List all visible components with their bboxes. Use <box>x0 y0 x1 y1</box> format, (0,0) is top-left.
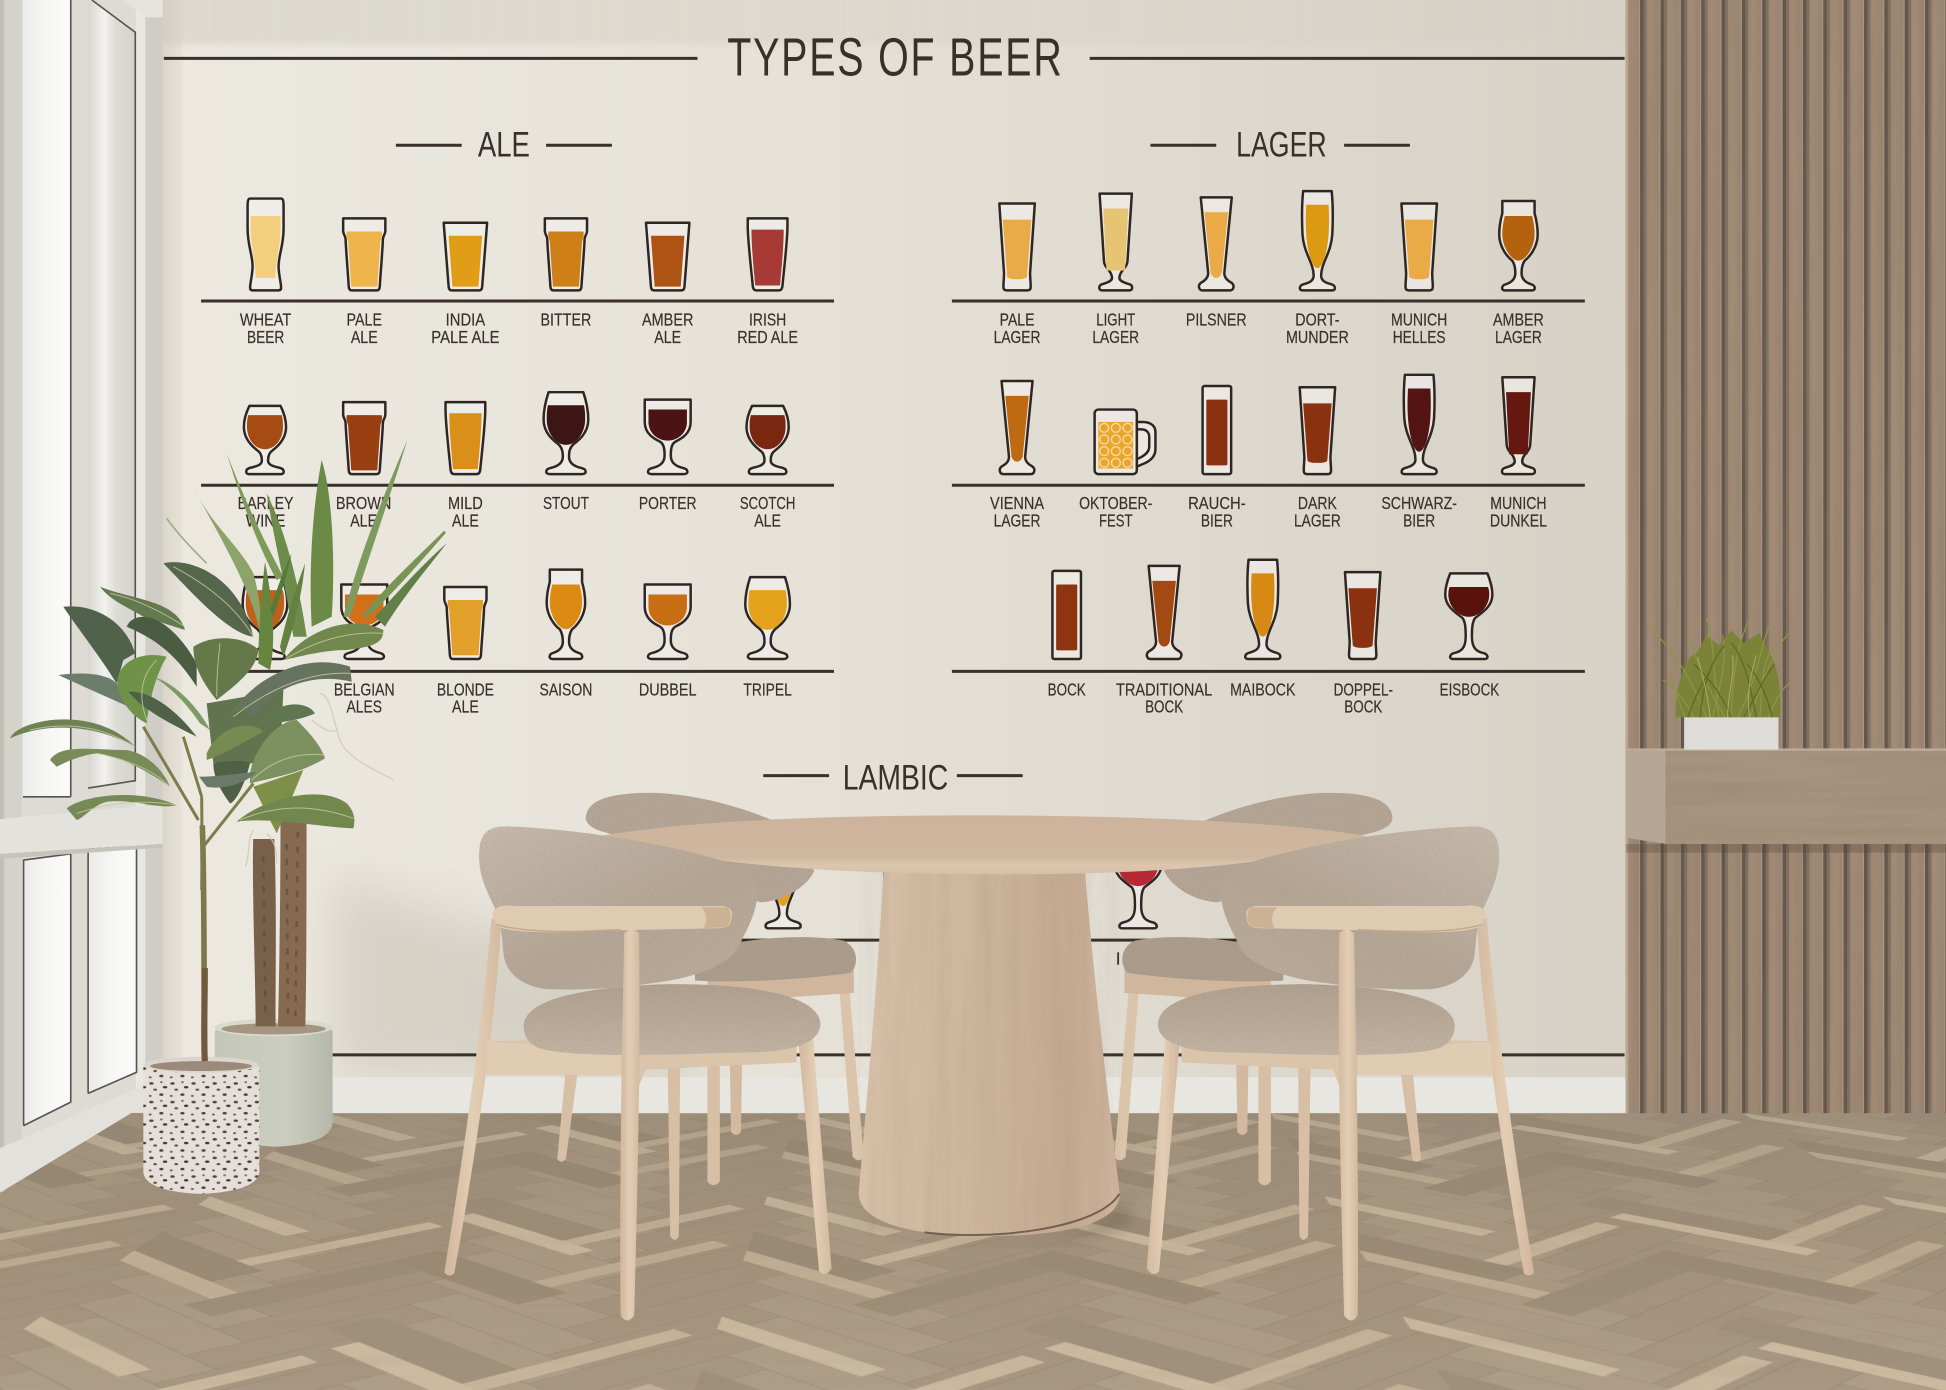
icon: oktoberfest mug <box>1095 410 1155 474</box>
label: dortmunder: DORT- <box>1295 310 1340 330</box>
icon: hidden lambic glass left <box>766 829 801 928</box>
label: traditional bock: TRADITIONAL <box>1116 679 1213 699</box>
label: bitter: BITTER <box>540 310 591 330</box>
label: pale ale: PALE <box>347 310 382 330</box>
label: wheat beer: WHEAT <box>240 310 292 330</box>
label: dortmunder <box>1286 310 1349 347</box>
label: mild ale: MILD <box>448 493 483 513</box>
icon: tripel glass <box>745 577 790 659</box>
icon: doppelbock glass <box>1345 572 1380 659</box>
label: scotch ale: ALE <box>754 511 781 531</box>
label: hidden lambic fragment <box>877 949 1121 969</box>
label: amber ale: ALE <box>654 327 681 347</box>
ficus stems <box>143 727 253 890</box>
chair: back left <box>557 793 864 1185</box>
label: barley wine: BARLEY <box>238 493 294 513</box>
label: maibock: MAIBOCK <box>1230 679 1296 699</box>
label: dark lager: LAGER <box>1294 511 1341 531</box>
icon: pilsner glass <box>1199 197 1234 290</box>
label: tripel: TRIPEL <box>743 679 792 699</box>
label: vienna lager <box>990 493 1044 531</box>
label: barley wine <box>238 493 294 531</box>
label: bock: BOCK <box>1048 679 1086 699</box>
grey pot with dracaena trunks <box>215 819 333 1147</box>
chair: front right <box>1147 826 1534 1320</box>
icon: bitter glass <box>545 218 587 290</box>
icon: light lager glass <box>1099 194 1132 290</box>
slatted wood wall panel <box>1626 0 1946 1113</box>
label: barley wine: WINE <box>246 511 285 531</box>
panel: ale <box>201 126 834 717</box>
label: india pale ale: PALE ALE <box>431 327 500 347</box>
label: belgian ales: ALES <box>347 697 382 717</box>
label: amber lager <box>1493 310 1544 347</box>
icon: dortmunder glass <box>1300 191 1335 290</box>
label: schwarzbier <box>1381 493 1457 531</box>
herringbone floor <box>0 1113 1946 1390</box>
heading: ale: ALE <box>478 126 530 164</box>
icon: munich helles glass <box>1401 204 1437 290</box>
label: brown ale: ALE <box>350 511 377 531</box>
label: munich helles <box>1391 310 1447 347</box>
icon: hidden lambic glass right <box>1114 843 1162 928</box>
label: irish red ale: RED ALE <box>737 327 798 347</box>
label: amber lager: LAGER <box>1495 327 1542 347</box>
label: blonde ale: ALE <box>452 697 479 717</box>
label: munich helles: MUNICH <box>1391 310 1447 330</box>
label: saison: SAISON <box>539 679 592 699</box>
label: irish red ale: IRISH <box>749 310 786 330</box>
label: traditional bock: BOCK <box>1145 697 1183 717</box>
icon: vienna lager glass <box>1000 381 1034 474</box>
label: scotch ale: SCOTCH <box>740 493 795 513</box>
label: traditional bock <box>1116 679 1213 717</box>
label: rauchbier: BIER <box>1201 511 1233 531</box>
icon: pale ale glass <box>343 218 385 290</box>
label: doppelbock: BOCK <box>1344 697 1383 717</box>
label: vienna lager: VIENNA <box>990 493 1044 513</box>
label: munich helles: HELLES <box>1393 327 1446 347</box>
back chairs <box>557 793 1421 1185</box>
speckled pot with ficus stem <box>143 825 259 1194</box>
label: belgian ales: BELGIAN <box>334 679 395 699</box>
label: schwarzbier: SCHWARZ- <box>1381 493 1457 513</box>
label: doppelbock <box>1334 679 1393 717</box>
label: light lager: LIGHT <box>1096 310 1136 330</box>
icon: brown ale glass <box>343 402 385 474</box>
icon: mild ale glass <box>446 402 485 474</box>
label: munich dunkel: MUNICH <box>1490 493 1547 513</box>
round table <box>597 815 1368 1243</box>
label: india pale ale: INDIA <box>446 310 485 330</box>
bottom rule <box>333 1054 1625 1056</box>
icon: amber ale glass <box>646 223 689 290</box>
label: pale ale <box>347 310 382 347</box>
label: pale lager <box>994 310 1040 347</box>
heading: lager: LAGER <box>1236 126 1327 164</box>
potted plants <box>10 440 447 1194</box>
label: munich dunkel: DUNKEL <box>1490 511 1547 531</box>
label: porter: PORTER <box>639 493 696 513</box>
panel: lambic <box>695 759 1278 969</box>
label: mild ale <box>448 493 483 531</box>
ficus leaves <box>10 562 393 867</box>
window panes <box>23 0 137 1126</box>
wooden shelf <box>1626 748 1946 853</box>
icon: saison glass <box>547 570 585 659</box>
icon: dubbel glass <box>645 585 691 659</box>
label: light lager: LAGER <box>1092 327 1139 347</box>
icon: eisbock glass <box>1445 573 1492 659</box>
icon: stout glass <box>544 392 588 474</box>
label: doppelbock: DOPPEL- <box>1334 679 1393 699</box>
icon: irish red ale glass <box>748 218 787 290</box>
icon: partly hidden ale glass <box>243 577 287 659</box>
label: hidden lambic fragment: F <box>877 949 888 969</box>
icon: wheat beer glass <box>248 199 284 290</box>
window on the left <box>0 0 163 1193</box>
wall <box>161 0 1628 1080</box>
chair: front left <box>444 826 832 1320</box>
label: munich dunkel <box>1490 493 1547 531</box>
front chairs <box>444 826 1534 1320</box>
title with rules: TYPES OF BEER <box>727 29 1064 88</box>
label: blonde ale <box>437 679 494 717</box>
icon: munich dunkel glass <box>1502 377 1535 474</box>
icon: amber lager glass <box>1499 201 1538 290</box>
label: pale ale: ALE <box>351 327 378 347</box>
icon: scotch ale glass <box>747 406 789 474</box>
icon: dark lager glass <box>1300 387 1335 474</box>
label: oktoberfest <box>1079 493 1153 531</box>
label: pilsner: PILSNER <box>1186 310 1247 330</box>
icon: bock glass <box>1052 571 1081 659</box>
icon: traditional bock glass <box>1147 566 1181 659</box>
icon: belgian ales glass <box>341 585 387 659</box>
label: india pale ale <box>431 310 500 347</box>
label: belgian ales <box>334 679 395 717</box>
chair: back right <box>1114 793 1421 1185</box>
label: dubbel: DUBBEL <box>639 679 697 699</box>
icon: porter glass <box>645 400 691 474</box>
panel: lager <box>952 126 1585 717</box>
grass planter on shelf <box>1648 617 1790 750</box>
label: mild ale: ALE <box>452 511 479 531</box>
heading: lambic: LAMBIC <box>843 759 948 797</box>
label: brown ale <box>336 493 391 531</box>
label: amber ale: AMBER <box>642 310 693 330</box>
label: pale lager: LAGER <box>994 327 1040 347</box>
label: pale lager: PALE <box>1000 310 1034 330</box>
icon: blonde ale glass <box>444 587 486 659</box>
floor shading <box>0 1113 1946 1390</box>
icon: maibock glass <box>1245 560 1280 659</box>
label: dark lager <box>1294 493 1341 531</box>
label: oktoberfest: FEST <box>1099 511 1133 531</box>
icon: rauchbier glass <box>1203 386 1231 474</box>
label: dortmunder: MUNDER <box>1286 327 1349 347</box>
label: stout: STOUT <box>543 493 589 513</box>
label: wheat beer <box>240 310 292 347</box>
baseboard <box>161 1077 1628 1113</box>
label: oktoberfest: OKTOBER- <box>1079 493 1153 513</box>
icon: india pale ale glass <box>444 223 487 290</box>
label: schwarzbier: BIER <box>1403 511 1435 531</box>
label: scotch ale <box>740 493 795 531</box>
label: brown ale: BROWN <box>336 493 391 513</box>
label: rauchbier <box>1188 493 1246 531</box>
label: light lager <box>1092 310 1139 347</box>
label: irish red ale <box>737 310 798 347</box>
icon: schwarzbier glass <box>1402 375 1437 474</box>
label: vienna lager: LAGER <box>994 511 1040 531</box>
label: amber ale <box>642 310 693 347</box>
icon: pale lager glass <box>999 204 1035 290</box>
icon: hidden lambic glass centre <box>884 840 913 928</box>
plant foliage <box>10 440 447 890</box>
label: dark lager: DARK <box>1298 493 1337 513</box>
dracaena fronds <box>167 440 447 833</box>
icon: barley wine glass <box>244 406 286 474</box>
label: blonde ale: BLONDE <box>437 679 494 699</box>
label: rauchbier: RAUCH- <box>1188 493 1246 513</box>
label: eisbock: EISBOCK <box>1440 679 1500 699</box>
label: hidden lambic fragment: I <box>1116 949 1121 969</box>
label: amber lager: AMBER <box>1493 310 1544 330</box>
label: wheat beer: BEER <box>247 327 284 347</box>
